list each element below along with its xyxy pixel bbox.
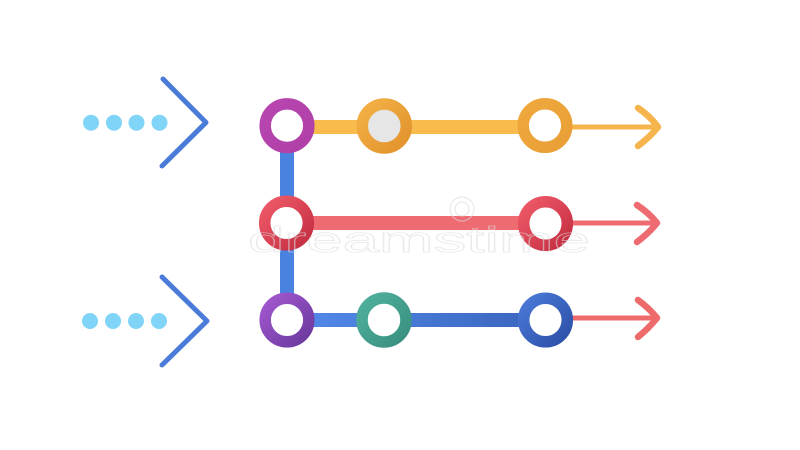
node: green (362, 298, 406, 342)
top input dots and chevron (83, 79, 206, 166)
top route: yellow line (310, 108, 658, 146)
bottom route: blue line and red arrow (310, 300, 657, 337)
middle route: red line (310, 205, 657, 242)
bottom input dots and chevron (82, 277, 207, 365)
node: red right (524, 202, 567, 245)
vertical blue connector (280, 148, 294, 298)
node: orange filled grey (362, 104, 406, 148)
node: purple top-left (265, 104, 309, 148)
node: blue right (524, 298, 567, 342)
watermark: dreamstime (248, 219, 590, 260)
node: violet bottom-left (265, 298, 309, 342)
node: orange right (523, 104, 567, 147)
node: red left (265, 201, 308, 245)
watermark (248, 197, 590, 260)
